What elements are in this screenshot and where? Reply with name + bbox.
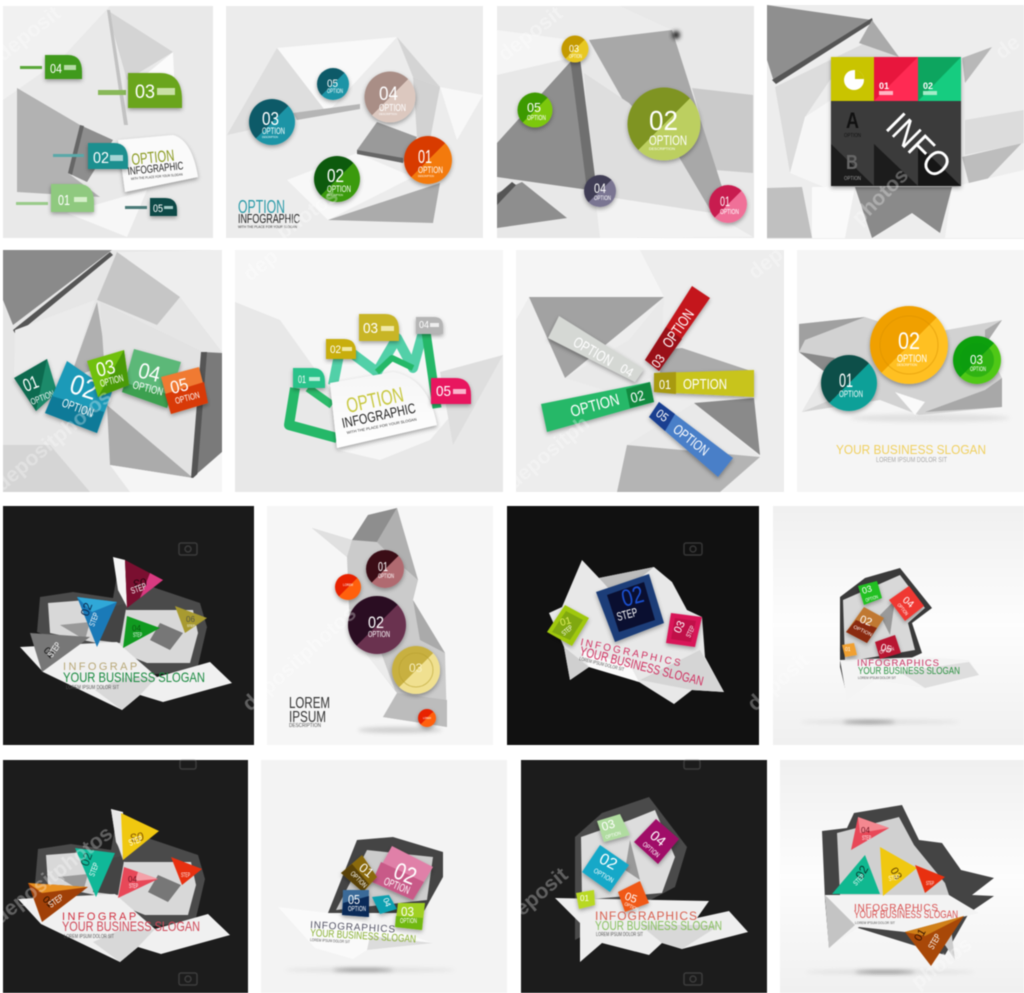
option infographic label: WITH THE PLACE FOR YOUR SLOGAN: [131, 172, 183, 181]
triangle 01: 01: [41, 645, 57, 661]
triangle 02: STEP: [87, 611, 101, 628]
triangle 05: STEP: [187, 623, 195, 628]
circle 05: [317, 68, 349, 100]
square 02: 02: [858, 614, 874, 629]
triangle 06: [171, 857, 202, 885]
circle 03: [562, 36, 588, 62]
square 01: OPTION: [29, 388, 56, 407]
triangle 04: [123, 616, 160, 648]
slogan: INFOGRAPHICS: [579, 637, 682, 669]
square 05: [161, 367, 208, 414]
slogan: INFOGRAPHICS: [310, 920, 396, 935]
tag 02: [53, 143, 128, 169]
panel: five radial option bars: [516, 250, 784, 492]
option infographic label: [330, 372, 437, 448]
triangle 04: 04: [132, 624, 141, 633]
square 05: [875, 635, 901, 659]
square 02: [846, 607, 884, 643]
slogan: [595, 909, 722, 938]
bar 05: 05: [653, 406, 671, 425]
square 01: STEP: [561, 624, 575, 638]
circle 02: 02: [368, 613, 384, 632]
square 02: OPTION: [60, 396, 96, 420]
circle 02: [348, 596, 406, 654]
circle 02: OPTION: [368, 630, 390, 639]
square 04: 04: [900, 595, 916, 611]
slogan: [578, 637, 705, 689]
triangle 02: [77, 597, 117, 647]
button 03: [953, 336, 1001, 384]
option infographic label: OPTION: [131, 148, 175, 169]
slogan: [836, 442, 986, 464]
square 02: [582, 845, 629, 892]
square 05: 05: [168, 374, 190, 398]
circle 04: [364, 72, 416, 122]
tag 01: [16, 184, 94, 212]
crumpled paper shape: [555, 797, 748, 962]
circle 03: DESCRIPTION: [262, 135, 278, 139]
watermarks: depositphotos: [238, 602, 361, 716]
panel: option circles on grey facets: [226, 6, 483, 238]
square 03: [597, 814, 630, 842]
bar 03: 03: [648, 351, 668, 371]
info word: INFO: [878, 105, 960, 186]
circle 02: [628, 88, 700, 160]
crumpled paper shape: [549, 560, 724, 704]
slogan: INFOGRAPHICS: [63, 661, 173, 673]
tile letter B: B: [846, 152, 858, 174]
watermarks: depositph: [502, 412, 594, 494]
circle 01: OPTION: [720, 209, 739, 216]
small red circle: [335, 574, 361, 600]
bar 02: [541, 382, 654, 432]
square 02: OPTION: [852, 624, 873, 638]
slogan: [857, 658, 960, 680]
square 03: [87, 350, 129, 397]
triangle 01: 01: [40, 894, 56, 910]
panel: light squares on dark shape: [773, 506, 1024, 745]
square 03: [858, 581, 882, 605]
slogan: LOREM IPSUM DOLOR SIT: [876, 455, 947, 464]
watermarks: photos: [272, 184, 343, 244]
square 03: 03: [94, 356, 118, 382]
square 01: [576, 890, 595, 909]
heading: option infographic: OPTION: [238, 197, 285, 217]
slogan: INFOGRAPHICS: [62, 911, 172, 923]
bar 04: OPTION: [570, 334, 616, 370]
crumpled paper shape: [822, 805, 994, 960]
slogan: YOUR BUSINESS SLOGAN: [63, 669, 205, 685]
option infographic label: [118, 135, 198, 192]
heading: option infographic: WITH THE PLACE FOR YOUR SLOGAN: [238, 225, 297, 229]
bar 03: [645, 286, 710, 371]
triangle 02: 02: [78, 850, 95, 868]
slogan: LOREM IPSUM DOLOR SIT: [64, 934, 114, 940]
circle 04: DESCRIPTION: [379, 112, 397, 116]
slogan: INFOGRAPHICS: [854, 903, 938, 914]
tag 01: 01: [58, 192, 70, 209]
square 04: OPTION: [895, 602, 909, 617]
crumpled paper shape: [278, 837, 443, 959]
square 03: STEP: [685, 625, 697, 639]
slogan: [854, 903, 958, 925]
triangle 02: [75, 848, 115, 897]
triangle red: [915, 865, 945, 893]
panel: three buttons with slogan: [798, 250, 1024, 492]
panel: light triangles on dark shape: [780, 760, 1024, 993]
tile letter B: OPTION: [844, 176, 861, 182]
triangle 03: STEP: [129, 581, 148, 596]
circle 05: 05: [527, 100, 541, 115]
tile text 02: [923, 81, 937, 95]
tag 05: [125, 198, 177, 216]
tag 03: 03: [135, 82, 155, 103]
square 01: [842, 643, 857, 657]
triangle 02: 02: [78, 600, 95, 618]
square 02: [372, 846, 433, 900]
square 04: [372, 895, 397, 914]
square 03: 03: [672, 619, 688, 635]
option infographic label: INFOGRAPHIC: [127, 160, 184, 178]
triangle red: STEP: [926, 881, 934, 887]
square 02: [45, 361, 112, 433]
slogan: YOUR BUSINESS SLOGAN: [578, 643, 705, 689]
tile letter B: [844, 152, 861, 182]
circle 02: DESCRIPTION: [649, 146, 675, 151]
watermarks: photos: [907, 933, 976, 993]
slogan: LOREM IPSUM DOLOR SIT: [310, 937, 351, 944]
heading: option infographic: [238, 197, 300, 229]
triangle 02: STEP: [852, 873, 867, 887]
circle 01: 01: [720, 193, 730, 209]
tag 04: 04: [50, 61, 62, 76]
circle 03: [249, 99, 295, 145]
circle 02: OPTION: [327, 184, 351, 194]
square 04: [634, 819, 679, 864]
slogan: YOUR BUSINESS SLOGAN: [836, 442, 986, 457]
watermarks: deposit: [500, 863, 572, 929]
heading: lorem ipsum: LOREM: [289, 695, 330, 712]
crumpled paper shape: [799, 317, 1002, 415]
circle 03: 03: [409, 661, 423, 675]
slogan: LOREM IPSUM DOLOR SIT: [579, 656, 625, 673]
tile letter A: OPTION: [844, 133, 861, 139]
panel: green ribbon with tags: [235, 250, 503, 492]
slogan: [63, 661, 205, 691]
tag 04: 04: [419, 320, 429, 331]
triangle 03: STEP: [888, 874, 900, 883]
square 05: OPTION: [623, 901, 640, 913]
button 02: DESCRIPTION: [897, 363, 917, 367]
bar 04: [548, 316, 644, 382]
button 01: OPTION: [839, 389, 863, 399]
circle 05: 05: [327, 78, 338, 90]
option infographic label: INFOGRAPHIC: [340, 400, 417, 431]
triangle 04: 04: [128, 875, 137, 884]
circle 04: OPTION: [379, 103, 406, 114]
circle 01: [366, 550, 404, 588]
bar 01: 01: [659, 377, 671, 392]
tag 04: [416, 317, 443, 334]
slogan: LOREM IPSUM DOLOR SIT: [66, 685, 119, 691]
square 05: 05: [348, 892, 360, 907]
heading: lorem ipsum: [289, 695, 330, 729]
circle 01: OPTION: [418, 165, 443, 175]
square 02: 02: [66, 368, 101, 406]
square 04: OPTION: [131, 379, 164, 398]
slogan: YOUR BUSINESS SLOGAN: [62, 918, 200, 934]
triangle 04: 04: [861, 826, 870, 835]
circle 03: OPTION: [569, 54, 582, 60]
square 05: [618, 881, 649, 913]
triangle 03: 03: [132, 575, 148, 591]
tag 01: 01: [298, 374, 306, 386]
square 02: 02: [596, 851, 620, 874]
square 04: [889, 586, 924, 621]
circle 02: 02: [327, 166, 344, 186]
square 05: OPTION: [348, 906, 366, 913]
panel: info tile grid: [766, 4, 1024, 239]
panel: option tags on grey facets: [3, 6, 213, 238]
tag 05: 05: [153, 203, 163, 215]
green ribbon: [289, 325, 437, 438]
square 05: 05: [623, 891, 639, 906]
slogan: INFOGRAPHICS: [857, 658, 939, 669]
crumpled paper shape: [20, 557, 232, 710]
triangle 04: STEP: [133, 633, 142, 639]
square 05: OPTION: [879, 646, 895, 656]
bar 05: OPTION: [670, 421, 712, 459]
tag 05: 05: [436, 383, 451, 400]
triangle 02: [832, 855, 880, 894]
triangle 03: [125, 560, 163, 608]
heading: option infographic: INFOGRAPHIC: [238, 212, 300, 226]
bar 03: OPTION: [659, 306, 698, 351]
option infographic label: WITH THE PLACE FOR YOUR SLOGAN: [346, 417, 417, 435]
panel: five tilted squares: [2, 249, 223, 492]
bar 04: 04: [618, 361, 636, 380]
square 01: [341, 855, 377, 892]
small red circle bottom: LOREM: [423, 717, 431, 720]
panel: vertical circles: [268, 506, 492, 744]
crumpled paper shape: [840, 568, 979, 700]
triangle 05: [175, 606, 207, 633]
square 03: 03: [401, 904, 414, 919]
triangle 03: [880, 847, 917, 896]
tag 02: [326, 339, 356, 359]
slogan: YOUR BUSINESS SLOGAN: [595, 918, 722, 933]
square 03: [395, 903, 425, 930]
circle 05: [518, 92, 552, 128]
button 03: OPTION: [970, 367, 986, 373]
heading: lorem ipsum: IPSUM: [289, 709, 326, 726]
square 03: 03: [600, 816, 617, 834]
panel: five circles on kite facets: [496, 6, 754, 238]
circle 01: 01: [378, 559, 388, 574]
slogan: [310, 920, 416, 945]
circle 03: [392, 646, 440, 694]
circle 02: [314, 156, 360, 202]
tag 03: [98, 73, 182, 108]
tile text 01: [879, 81, 893, 95]
tile grid: [831, 57, 961, 186]
tile letter A: A: [846, 108, 859, 133]
circle 01: 01: [418, 147, 432, 167]
button 02: [870, 306, 948, 384]
triangle 04: STEP: [129, 884, 138, 890]
circle 03: 03: [262, 109, 279, 129]
square 03: OPTION: [400, 918, 417, 925]
square 03: OPTION: [99, 373, 125, 390]
circle 02: 02: [649, 105, 678, 136]
panel: dark squares with banner: [520, 759, 768, 993]
button 02: 02: [898, 328, 920, 355]
slogan: YOUR BUSINESS SLOGAN: [310, 927, 416, 945]
square 03: 03: [861, 583, 873, 596]
square 02: STEP: [615, 605, 639, 624]
triangle 03: 03: [887, 866, 904, 882]
bar 02: OPTION: [569, 392, 621, 421]
circle 01: [709, 185, 747, 223]
heading: lorem ipsum: DESCRIPTION: [289, 723, 321, 729]
square 02: OPTION: [382, 876, 411, 897]
triangle 03: [111, 809, 159, 860]
triangle 03: STEP: [127, 834, 144, 848]
circle 01: OPTION: [378, 574, 394, 580]
triangle 01: [905, 916, 964, 966]
square 02: 02: [619, 581, 647, 613]
tile letter A: [844, 108, 861, 139]
triangle 02: STEP: [87, 861, 101, 878]
circle 03: 03: [569, 44, 579, 55]
panel: light squares with banner: [262, 760, 506, 992]
square 02: OPTION: [592, 868, 615, 885]
icon: camera watermarks: [179, 543, 702, 985]
tile text 02: 02: [923, 81, 933, 91]
circle 05: OPTION: [527, 115, 546, 122]
crumpled paper column: [312, 508, 447, 727]
square 02: 02: [390, 858, 420, 891]
tag 01: [293, 368, 325, 388]
triangle 02: 02: [852, 863, 871, 882]
square 01: 01: [356, 860, 377, 881]
crumpled paper shape: [18, 809, 230, 962]
tile text 01: 01: [879, 81, 889, 91]
button 01: 01: [839, 371, 853, 392]
watermarks: de: [991, 31, 1024, 64]
slogan: [62, 911, 200, 940]
square 01: OPTION: [349, 870, 368, 890]
square 01: 01: [559, 615, 573, 629]
option infographic label: OPTION: [344, 383, 406, 418]
triangle 06: STEP: [181, 873, 190, 879]
square 01: [14, 359, 57, 411]
slogan: INFOGRAPHICS: [595, 909, 697, 923]
small red circle bottom: [418, 709, 436, 727]
panel: dark triangles step infographic: [2, 505, 255, 746]
square 04: OPTION: [641, 841, 661, 859]
panel: dark coloured triangles: [2, 759, 249, 993]
square 03: OPTION: [865, 594, 879, 604]
square 01: 01: [845, 647, 851, 653]
tag 03: 03: [363, 320, 378, 337]
circle 04: [584, 175, 616, 207]
circle 02: DESCRIPTION: [327, 193, 343, 197]
button 01: [821, 355, 877, 411]
triangle 03: 03: [129, 829, 145, 845]
slogan: YOUR BUSINESS SLOGAN: [854, 909, 958, 921]
square 04: [122, 349, 181, 408]
tag 02: 02: [330, 344, 341, 356]
square 01: 01: [20, 372, 41, 396]
triangle 01: [30, 633, 90, 672]
circle 04: 04: [379, 84, 398, 105]
circle 01: [404, 136, 452, 184]
circle 04: OPTION: [594, 196, 611, 202]
watermarks: deposit: [743, 649, 814, 716]
panel: dark squares step infographic: [506, 505, 760, 746]
watermarks: deposit: [494, 2, 567, 66]
square 01: [547, 605, 589, 646]
triangle 04: [118, 867, 158, 898]
circle 04: 04: [594, 180, 606, 196]
triangle 01: [28, 883, 88, 922]
watermarks: dep: [239, 245, 283, 286]
triangle 05: 06: [186, 615, 195, 624]
tag 05: [431, 378, 471, 404]
circle 01: DESCRIPTION: [418, 174, 434, 178]
slogan: LOREM IPSUM DOLOR SIT: [858, 675, 896, 680]
slogan: LOREM IPSUM DOLOR SIT: [596, 932, 643, 938]
triangle 04: STEP: [862, 836, 871, 842]
square 05: OPTION: [174, 390, 201, 406]
bar 02: 02: [629, 387, 646, 406]
square 04: 04: [381, 897, 393, 909]
square 05: [342, 890, 369, 917]
triangle 01: 01: [912, 927, 929, 944]
small red circle: LOREM: [343, 583, 353, 587]
triangle 01: STEP: [926, 932, 943, 951]
icon: pie chart: [844, 70, 864, 90]
button 03: 03: [970, 352, 983, 367]
square 02: [596, 574, 664, 642]
slogan: LOREM IPSUM DOLOR SIT: [855, 920, 895, 925]
square 04: 04: [136, 358, 163, 387]
tag 03: [359, 314, 399, 341]
circle 02: OPTION: [649, 132, 687, 148]
circle 05: OPTION: [327, 89, 343, 95]
bar 05: [649, 402, 733, 477]
tag 04: [20, 55, 82, 79]
bar 01: OPTION: [683, 376, 727, 393]
square 03: [666, 613, 702, 647]
triangle 01: STEP: [46, 892, 65, 910]
bar 01: [654, 370, 754, 397]
slogan: YOUR BUSINESS SLOGAN: [858, 665, 960, 677]
watermarks: dep: [744, 243, 788, 284]
circle 03: OPTION: [262, 126, 285, 136]
tag 02: 02: [93, 150, 109, 167]
square 04: 04: [647, 827, 669, 849]
triangle 04: [851, 817, 889, 850]
triangle 01: STEP: [45, 640, 63, 659]
square 01: 01: [580, 894, 589, 903]
button 02: OPTION: [897, 353, 927, 365]
square 05: 05: [879, 642, 893, 656]
watermarks: photos: [847, 164, 913, 230]
square 03: OPTION: [605, 830, 622, 841]
